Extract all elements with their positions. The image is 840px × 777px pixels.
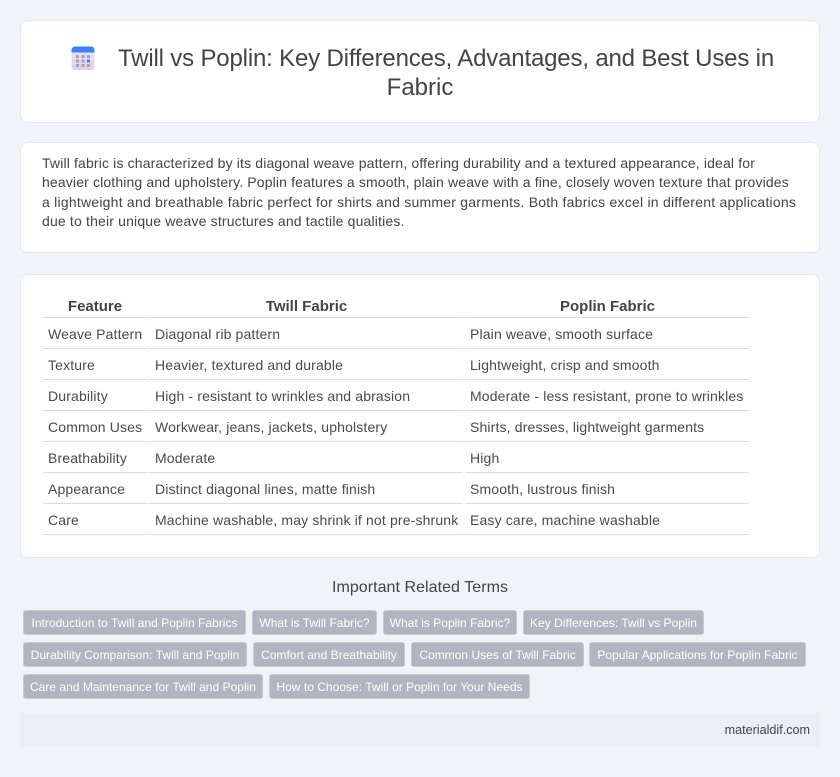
text: Lightweight, crisp and smooth [470, 357, 660, 373]
text: Popular Applications for Poplin Fabric [597, 648, 798, 662]
text: Twill Fabric [266, 298, 347, 315]
related term tags [23, 610, 806, 699]
text: Twill fabric is characterized by its diagonal weave pattern, offering durability and a textured appearance, ideal for [42, 155, 755, 171]
text: Durability [48, 388, 108, 404]
text: Plain weave, smooth surface [470, 326, 653, 342]
footer source text: materialdif.com [725, 723, 810, 737]
text: Shirts, dresses, lightweight garments [470, 419, 704, 435]
text: High - resistant to wrinkles and abrasion [155, 388, 410, 404]
title line 2: Fabric [387, 74, 453, 101]
table headers [68, 298, 655, 315]
panel: introduction [20, 142, 820, 253]
text: Smooth, lustrous finish [470, 481, 615, 497]
icon: calendar [72, 46, 94, 70]
text: Poplin Fabric [560, 298, 655, 315]
text: What is Twill Fabric? [259, 616, 370, 630]
text: Easy care, machine washable [470, 512, 660, 528]
text: Care and Maintenance for Twill and Poplin [30, 680, 256, 694]
text: Heavier, textured and durable [155, 357, 343, 373]
text: Feature [68, 298, 122, 315]
panel: comparison table [20, 274, 820, 558]
text: Moderate - less resistant, prone to wrinkles [470, 388, 744, 404]
text: Care [48, 512, 79, 528]
footer bar [20, 713, 820, 747]
text: Introduction to Twill and Poplin Fabrics [31, 616, 238, 630]
text: Common Uses [48, 419, 142, 435]
text: Workwear, jeans, jackets, upholstery [155, 419, 387, 435]
text: Key Differences: Twill vs Poplin [530, 616, 697, 630]
text: Distinct diagonal lines, matte finish [155, 481, 375, 497]
text: High [470, 450, 499, 466]
text: due to their unique weave structures and tactile qualities. [42, 213, 405, 229]
text: heavier clothing and upholstery. Poplin features a smooth, plain weave with a fine, closely woven texture that provides [42, 174, 789, 190]
text: Texture [48, 357, 95, 373]
text: a lightweight and breathable fabric perfect for shirts and summer garments. Both fabrics excel in different applications [42, 194, 796, 210]
text: Common Uses of Twill Fabric [419, 648, 576, 662]
text: Durability Comparison: Twill and Poplin [31, 648, 239, 662]
text: Appearance [48, 481, 125, 497]
text: Comfort and Breathability [261, 648, 397, 662]
text: Machine washable, may shrink if not pre-shrunk [155, 512, 458, 528]
text: What is Poplin Fabric? [390, 616, 510, 630]
intro paragraph [42, 155, 796, 229]
text: Weave Pattern [48, 326, 142, 342]
heading: important related terms: Important Related Terms [332, 579, 508, 596]
title line 1: Twill vs Poplin: Key Differences, Advantages, and Best Uses in [118, 45, 774, 72]
panel: title card [20, 20, 820, 123]
text: Diagonal rib pattern [155, 326, 280, 342]
text: Breathability [48, 450, 127, 466]
table rows [43, 317, 749, 535]
text: Moderate [155, 450, 215, 466]
text: How to Choose: Twill or Poplin for Your Needs [276, 680, 523, 694]
